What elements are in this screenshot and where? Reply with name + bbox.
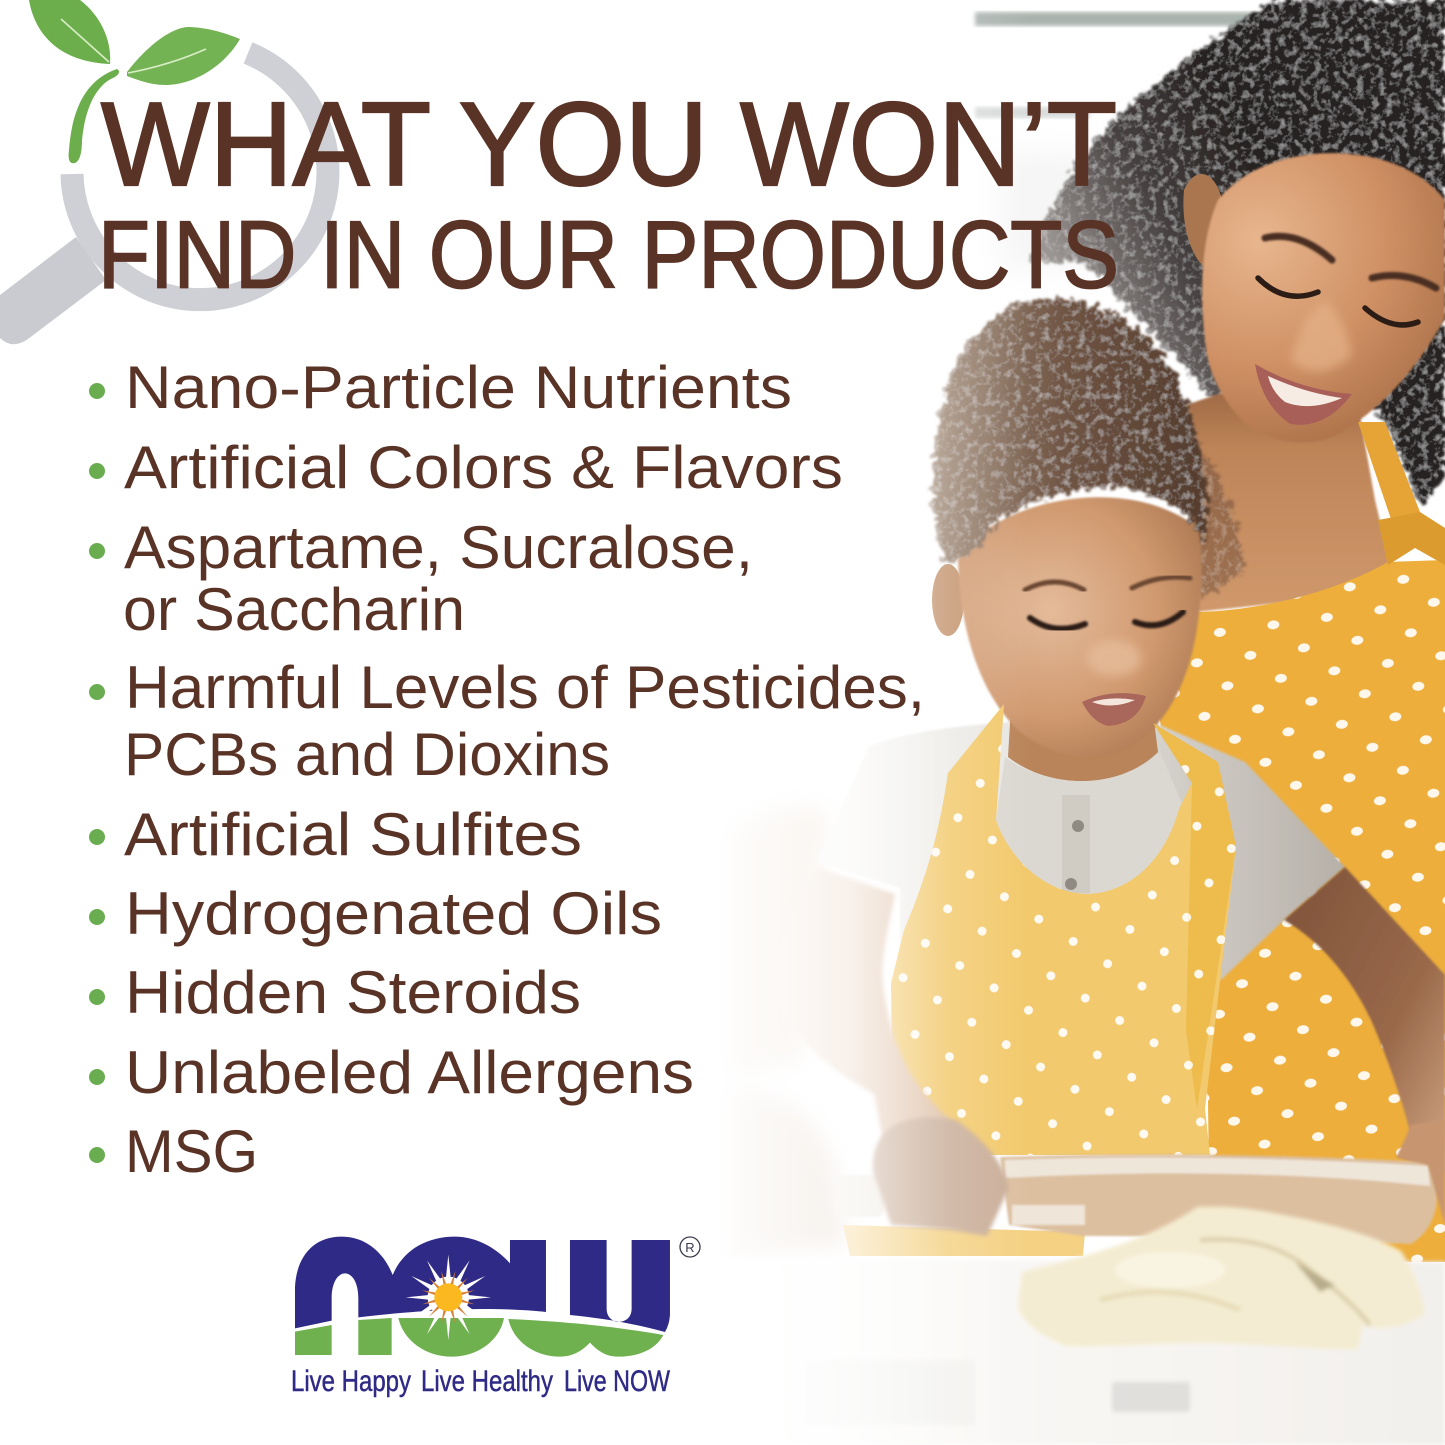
right leaf xyxy=(127,27,240,85)
item: pesticides, pcbs and dioxins: PCBs and Dioxins xyxy=(124,721,610,788)
title xyxy=(98,78,1119,308)
woman ear xyxy=(1183,174,1222,272)
woman eyes xyxy=(1258,278,1418,325)
item: aspartame, sucralose, saccharin xyxy=(89,514,753,643)
cookie cutters xyxy=(805,1360,1190,1425)
child eyes xyxy=(1030,612,1183,629)
rolling pin xyxy=(834,1155,1437,1244)
magnifier ring xyxy=(72,53,328,300)
woman neck and chest xyxy=(1186,360,1392,612)
child nose xyxy=(1087,640,1141,676)
photo: mother and daughter baking xyxy=(690,0,1445,1445)
tagline xyxy=(291,1365,671,1398)
child ear xyxy=(932,564,964,636)
woman mouth xyxy=(1255,364,1352,425)
registered mark xyxy=(680,1237,700,1257)
white fade overlay xyxy=(690,0,1030,1445)
child left arm xyxy=(777,867,960,1175)
item: unlabeled allergens: Unlabeled Allergens xyxy=(125,1039,694,1106)
item: nano-particle nutrients: Nano-Particle Nutrients xyxy=(125,354,792,421)
kitchen background xyxy=(975,12,1260,270)
item: msg: MSG xyxy=(125,1118,258,1185)
icon: green sprout xyxy=(29,0,240,163)
child left hand xyxy=(873,1117,1009,1236)
left leaf xyxy=(29,0,110,64)
child eyebrows xyxy=(1025,577,1190,590)
item: pesticides, pcbs and dioxins: Harmful Levels of Pesticides, xyxy=(125,654,925,721)
woman face xyxy=(1202,153,1445,443)
title line 1: WHAT YOU WON’T xyxy=(101,78,1117,211)
child apron xyxy=(891,704,1236,1155)
item: aspartame, sucralose, saccharin: or Saccharin xyxy=(123,576,465,643)
child right arm xyxy=(1284,867,1445,1172)
logo: NOW xyxy=(291,1237,700,1398)
logo mark xyxy=(295,1237,670,1357)
dough xyxy=(1018,1207,1424,1349)
child undershirt placket xyxy=(996,752,1185,896)
item: hidden steroids: Hidden Steroids xyxy=(125,959,581,1026)
child neck xyxy=(1008,690,1158,781)
child mouth xyxy=(1082,693,1146,726)
item: pesticides, pcbs and dioxins xyxy=(89,654,925,788)
woman neck hair strands xyxy=(1187,447,1245,600)
woman eyebrows xyxy=(1265,236,1436,288)
icon: magnifying glass xyxy=(0,53,328,344)
item: artificial sulfites: Artificial Sulfites xyxy=(124,801,582,868)
magnifier handle xyxy=(0,237,106,344)
tagline: Live Happy xyxy=(291,1365,411,1398)
yellow baking mat xyxy=(843,1225,1085,1256)
kitchen table xyxy=(700,1258,1445,1445)
stem xyxy=(69,69,119,163)
item: aspartame, sucralose, saccharin: Aspartame, Sucralose, xyxy=(124,514,753,581)
title line 2: FIND IN OUR PRODUCTS xyxy=(98,202,1119,308)
child hair xyxy=(932,298,1207,561)
ghosted left arm and hands xyxy=(730,807,845,1258)
child right hand xyxy=(1397,1120,1445,1225)
child face xyxy=(958,497,1201,758)
child shirt xyxy=(817,722,1345,1000)
item: artificial colors and flavors: Artificial Colors & Flavors xyxy=(124,434,843,501)
woman apron xyxy=(1160,422,1445,1262)
woman nose xyxy=(1290,300,1352,371)
registered mark: R xyxy=(685,1240,695,1255)
tagline: Live Healthy xyxy=(421,1365,553,1398)
list of excluded ingredients xyxy=(89,354,925,1185)
item: hydrogenated oils: Hydrogenated Oils xyxy=(125,880,662,947)
white undershirt xyxy=(1340,560,1395,600)
tagline: Live NOW xyxy=(564,1365,671,1398)
woman hair xyxy=(1030,0,1445,505)
